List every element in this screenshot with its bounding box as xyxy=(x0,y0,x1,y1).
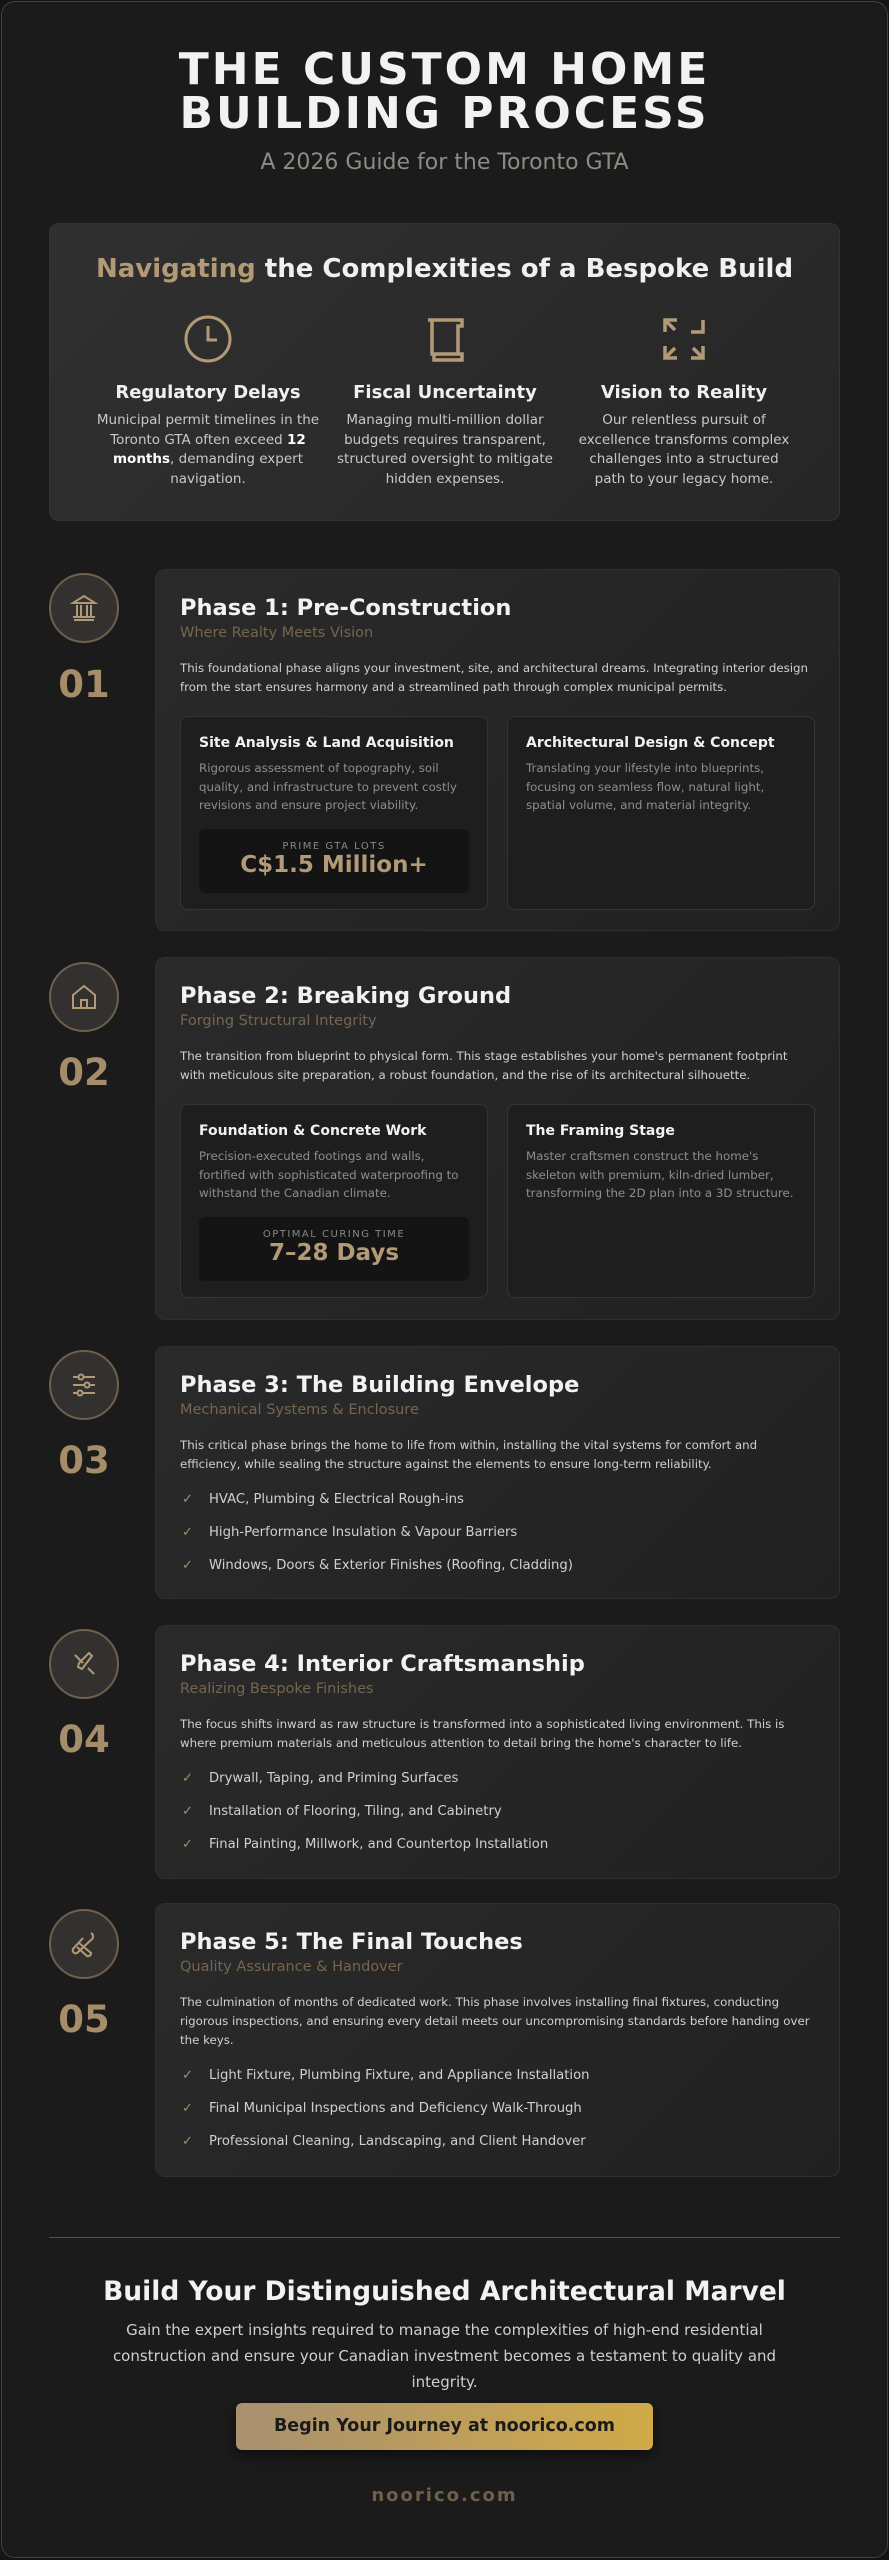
title: BUILDING PROCESS xyxy=(179,88,710,139)
icon: phase 5 tools xyxy=(49,1909,119,1979)
panel: phase 5: Phase 5: The Final Touches xyxy=(180,1929,523,1955)
icon: expand arrows xyxy=(663,318,705,360)
stat: curing time: OPTIMAL CURING TIME xyxy=(263,1228,405,1240)
column: fiscal uncertainty: Fiscal Uncertainty xyxy=(353,382,537,403)
checklist: phase 5: ✓ xyxy=(182,2068,193,2083)
subcard: site analysis xyxy=(180,716,488,910)
subcard: site analysis: Site Analysis & Land Acquisition xyxy=(199,735,454,751)
subtitle: A 2026 Guide for the Toronto GTA xyxy=(260,150,629,175)
checklist: phase 5 xyxy=(182,2068,590,2149)
subcard: foundation xyxy=(180,1104,488,1298)
panel: phase 4: Phase 4: Interior Craftsmanship xyxy=(180,1651,585,1677)
checklist: phase 4 xyxy=(182,1771,548,1852)
footer: noorico.com xyxy=(371,2485,518,2506)
subcard: foundation: Foundation & Concrete Work xyxy=(199,1123,426,1139)
subcard: architectural design: Translating your lifestyle into blueprints, focusing on seamless flow, natural light, spatial volume, and material integrity. xyxy=(526,761,764,812)
panel: phase 5 xyxy=(155,1903,840,2177)
panel: phase 2: Forging Structural Integrity xyxy=(180,1013,377,1029)
stat: prime lots xyxy=(199,828,469,892)
subcard: architectural design: Architectural Design & Concept xyxy=(526,735,775,751)
icon: phase 1 bank xyxy=(49,573,119,643)
checklist: phase 3: HVAC, Plumbing & Electrical Rough-ins xyxy=(209,1492,464,1507)
icon: scroll xyxy=(428,318,464,362)
checklist: phase 3: High-Performance Insulation & Vapour Barriers xyxy=(209,1525,517,1540)
checklist: phase 3: Windows, Doors & Exterior Finishes (Roofing, Cladding) xyxy=(209,1558,573,1573)
panel: phase 5: Quality Assurance & Handover xyxy=(180,1959,403,1975)
checklist: phase 5: ✓ xyxy=(182,2134,193,2149)
checklist: phase 4: Installation of Flooring, Tiling, and Cabinetry xyxy=(209,1804,502,1819)
panel: phase 1: Phase 1: Pre-Construction xyxy=(180,595,511,621)
panel: phase 2: The transition from blueprint to physical form. This stage establishes your home's permanent footprint with meticulous site preparation, a robust foundation, and the rise of its architectural silhouette. xyxy=(180,1049,787,1082)
number 02: 02 xyxy=(58,1051,110,1094)
subcard: framing xyxy=(507,1104,815,1298)
panel: phase 2: Phase 2: Breaking Ground xyxy=(180,983,511,1009)
checklist: phase 3: ✓ xyxy=(182,1558,193,1573)
checklist: phase 4: ✓ xyxy=(182,1804,193,1819)
panel: phase 4 xyxy=(155,1625,840,1879)
panel: phase 4: Realizing Bespoke Finishes xyxy=(180,1681,374,1697)
icon: phase 4 brush xyxy=(49,1629,119,1699)
checklist: phase 5: ✓ xyxy=(182,2101,193,2116)
column: regulatory delays: Regulatory Delays xyxy=(115,382,301,403)
panel: phase 5: The culmination of months of dedicated work. This phase involves installing final fixtures, conducting rigorous inspections, and ensuring every detail meets our uncompromising standards before handing over the keys. xyxy=(180,1995,810,2047)
checklist: phase 5: Professional Cleaning, Landscaping, and Client Handover xyxy=(209,2134,586,2149)
panel: phase 3: Mechanical Systems & Enclosure xyxy=(180,1402,419,1418)
panel: phase 3: This critical phase brings the home to life from within, installing the vital systems for comfort and efficiency, while sealing the structure against the elements to ensure long-term reliability. xyxy=(180,1438,757,1471)
cta text: Gain the expert insights required to manage the complexities of high-end residential construction and ensure your Canadian investment becomes a testament to quality and integrity. xyxy=(113,2321,776,2391)
column: vision to reality: Our relentless pursuit of excellence transforms complex challenges into a structured path to your legacy home. xyxy=(579,412,789,486)
stat: curing time xyxy=(199,1216,469,1280)
title xyxy=(178,44,710,139)
panel: complexities xyxy=(49,223,840,521)
cta button: Begin Your Journey at noorico.com xyxy=(274,2416,615,2436)
checklist: phase 3: ✓ xyxy=(182,1492,193,1507)
subcard: framing: The Framing Stage xyxy=(526,1123,675,1139)
checklist: phase 4: ✓ xyxy=(182,1837,193,1852)
cta button xyxy=(236,2403,653,2450)
panel: phase 1 xyxy=(155,569,840,931)
panel: phase 3 xyxy=(155,1346,840,1599)
checklist: phase 3: ✓ xyxy=(182,1525,193,1540)
title: THE CUSTOM HOME xyxy=(179,44,710,95)
heading: complexities: Navigating the Complexities of a Bespoke Build xyxy=(96,254,793,284)
column: vision to reality xyxy=(579,318,789,486)
icon: phase 3 sliders xyxy=(49,1350,119,1420)
number 03: 03 xyxy=(58,1439,110,1482)
column: vision to reality: Vision to Reality xyxy=(601,382,767,403)
cta heading: Build Your Distinguished Architectural Marvel xyxy=(103,2276,786,2307)
panel: phase 2 xyxy=(155,957,840,1320)
stat: curing time: 7–28 Days xyxy=(269,1240,399,1266)
column: fiscal uncertainty xyxy=(337,318,553,486)
stat: prime lots: C$1.5 Million+ xyxy=(240,852,428,878)
number 04: 04 xyxy=(58,1718,110,1761)
column: regulatory delays xyxy=(97,316,319,486)
checklist: phase 3 xyxy=(182,1492,573,1573)
column: regulatory delays: Municipal permit timelines in the Toronto GTA often exceed 12 months, demanding expert navigation. xyxy=(97,412,319,486)
subcard: site analysis: Rigorous assessment of topography, soil quality, and infrastructure to prevent costly revisions and ensure project viability. xyxy=(199,761,457,812)
subcard: architectural design xyxy=(507,716,815,910)
subcard: framing: Master craftsmen construct the home's skeleton with premium, kiln-dried lumber, transforming the 2D plan into a 3D structure. xyxy=(526,1149,793,1200)
subcard: foundation: Precision-executed footings and walls, fortified with sophisticated waterproofing to withstand the Canadian climate. xyxy=(199,1149,458,1200)
checklist: phase 4: Final Painting, Millwork, and Countertop Installation xyxy=(209,1837,548,1852)
checklist: phase 4: Drywall, Taping, and Priming Surfaces xyxy=(209,1771,458,1786)
panel: phase 4: The focus shifts inward as raw structure is transformed into a sophisticated living environment. This is where premium materials and meticulous attention to detail bring the home's character to life. xyxy=(180,1717,784,1750)
column: fiscal uncertainty: Managing multi-million dollar budgets requires transparent, structured oversight to mitigate hidden expenses. xyxy=(337,412,553,486)
checklist: phase 5: Light Fixture, Plumbing Fixture, and Appliance Installation xyxy=(209,2068,590,2083)
number 01: 01 xyxy=(58,663,110,706)
panel: phase 1: This foundational phase aligns your investment, site, and architectural dreams. Integrating interior design from the start ensures harmony and a streamlined path through complex municipal permits. xyxy=(180,661,808,694)
icon: phase 2 home xyxy=(49,962,119,1032)
panel: phase 1: Where Realty Meets Vision xyxy=(180,625,373,641)
checklist: phase 5: Final Municipal Inspections and Deficiency Walk-Through xyxy=(209,2101,582,2116)
number 05: 05 xyxy=(58,1998,110,2041)
icon: clock xyxy=(184,316,232,362)
checklist: phase 4: ✓ xyxy=(182,1771,193,1786)
panel: phase 3: Phase 3: The Building Envelope xyxy=(180,1372,579,1398)
stat: prime lots: PRIME GTA LOTS xyxy=(282,840,386,852)
